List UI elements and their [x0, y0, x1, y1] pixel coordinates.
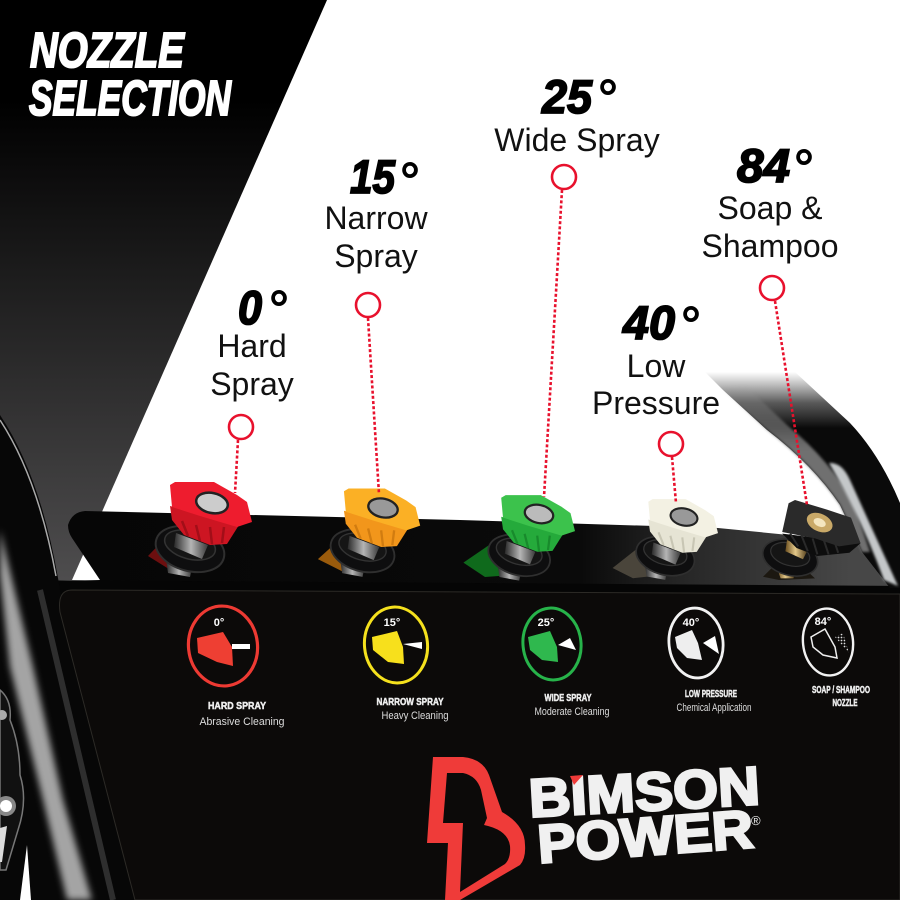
panel icon: low pressure: Chemical Application	[676, 702, 752, 714]
nozzle: 84 degree black soap	[759, 500, 861, 582]
panel icon: narrow spray: NARROW SPRAY	[376, 697, 444, 708]
dark diagonal header panel	[0, 0, 327, 580]
nozzle: 0 degree red	[148, 482, 252, 579]
callout: 40 degree low pressure	[592, 296, 720, 503]
brand wordmark: ®	[751, 813, 761, 828]
brand wordmark: BIMSON	[527, 756, 761, 829]
callout: 15 degree narrow spray: Narrow	[324, 200, 428, 236]
panel icon: hard spray: HARD SPRAY	[208, 701, 266, 712]
front control panel	[60, 590, 900, 900]
title: SELECTION	[29, 72, 232, 126]
bolts	[0, 690, 24, 870]
panel icon: narrow spray	[361, 604, 448, 722]
left handle frame	[0, 415, 140, 900]
callout: 84 degree soap and shampoo: °	[794, 139, 814, 197]
panel icon: soap shampoo: SOAP / SHAMPOO	[812, 685, 870, 696]
callout: 0 degree hard spray: Hard	[217, 328, 287, 364]
panel icon: hard spray: Abrasive Cleaning	[200, 716, 284, 728]
brand wordmark	[527, 756, 761, 875]
callout: 25 degree wide spray: Wide Spray	[494, 122, 660, 158]
panel icon: low pressure	[665, 605, 752, 714]
nozzle: 15 degree yellow	[318, 488, 420, 579]
panel icon: wide spray: WIDE SPRAY	[544, 693, 592, 704]
right handle tube	[705, 372, 900, 588]
panel icon: hard spray	[185, 603, 284, 728]
panel icon: hard spray: 0°	[214, 617, 224, 629]
brand wordmark: POWER	[535, 799, 755, 875]
title	[29, 24, 232, 126]
panel icon: low pressure: LOW PRESSURE	[685, 689, 737, 700]
callout: 40 degree low pressure: 40	[622, 296, 675, 349]
panel icon: narrow spray: Heavy Cleaning	[382, 710, 448, 722]
panel icon: wide spray	[519, 605, 610, 718]
panel icon: wide spray: 25°	[538, 617, 554, 629]
callout: 15 degree narrow spray: °	[400, 152, 420, 210]
callout: 0 degree hard spray: °	[269, 280, 289, 338]
callout: 84 degree soap and shampoo: 84	[737, 139, 790, 192]
callout: 84 degree soap and shampoo: Shampoo	[702, 228, 838, 264]
panel icon: soap shampoo: NOZZLE	[832, 698, 858, 709]
callout: 15 degree narrow spray	[324, 150, 428, 494]
callout: 15 degree narrow spray: Spray	[334, 238, 418, 274]
panel icon: low pressure: 40°	[683, 617, 699, 629]
callout: 40 degree low pressure: °	[681, 296, 701, 354]
brand logo mark	[427, 757, 525, 900]
callout: 25 degree wide spray: °	[598, 69, 618, 127]
title: NOZZLE	[30, 24, 185, 78]
panel icon: narrow spray: 15°	[384, 617, 400, 629]
panel icon: soap shampoo	[800, 606, 870, 709]
callout: 40 degree low pressure: Low	[627, 348, 686, 384]
callout: 0 degree hard spray	[210, 280, 294, 493]
nozzle: 25 degree green	[463, 495, 575, 583]
callout: 0 degree hard spray: Spray	[210, 366, 294, 402]
callout: 40 degree low pressure: Pressure	[592, 385, 720, 421]
callout: 25 degree wide spray	[494, 69, 660, 497]
panel icon: soap shampoo: 84°	[815, 616, 831, 628]
callout: 84 degree soap and shampoo	[702, 139, 838, 505]
callout: 0 degree hard spray: 0	[238, 281, 262, 334]
callout: 84 degree soap and shampoo: Soap &	[718, 190, 822, 226]
callout: 15 degree narrow spray: 15	[350, 150, 396, 203]
nozzle: 40 degree white	[613, 499, 718, 582]
bracket plate shadow bar	[40, 580, 900, 600]
panel icon: wide spray: Moderate Cleaning	[534, 706, 610, 718]
callout: 25 degree wide spray: 25	[541, 70, 593, 123]
upper nozzle bracket plate	[40, 511, 900, 600]
